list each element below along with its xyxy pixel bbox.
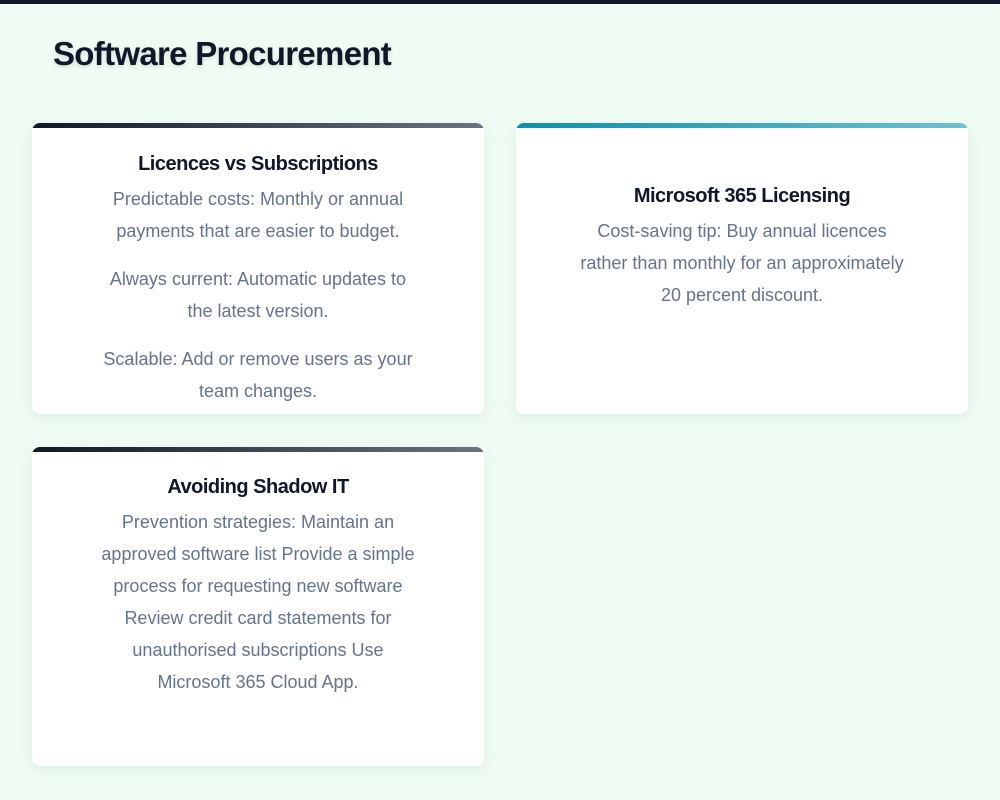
panel: avoiding shadow IT <box>32 447 484 766</box>
text: always current: Always current: Automatic updates to the latest version. <box>110 269 406 321</box>
text: prevention strategies: Prevention strategies: Maintain an approved software list Provide a simple process for requesting new software Review credit card statements for unauthorised subscriptions Use Microsoft 365 Cloud App. <box>101 512 415 692</box>
heading: microsoft 365: Microsoft 365 Licensing <box>634 185 850 207</box>
panel: licences vs subscriptions <box>32 123 484 414</box>
panel: microsoft 365 licensing <box>516 123 968 414</box>
text: predictable costs: Predictable costs: Monthly or annual payments that are easier to budget. <box>113 189 403 241</box>
heading: shadow IT: Avoiding Shadow IT <box>167 476 349 498</box>
title: Software Procurement <box>53 35 391 72</box>
text: cost-saving tip: Cost-saving tip: Buy annual licences rather than monthly for an approximately 20 percent discount. <box>580 221 904 305</box>
heading: licences: Licences vs Subscriptions <box>138 153 378 175</box>
text: scalable: Scalable: Add or remove users as your team changes. <box>103 349 413 401</box>
